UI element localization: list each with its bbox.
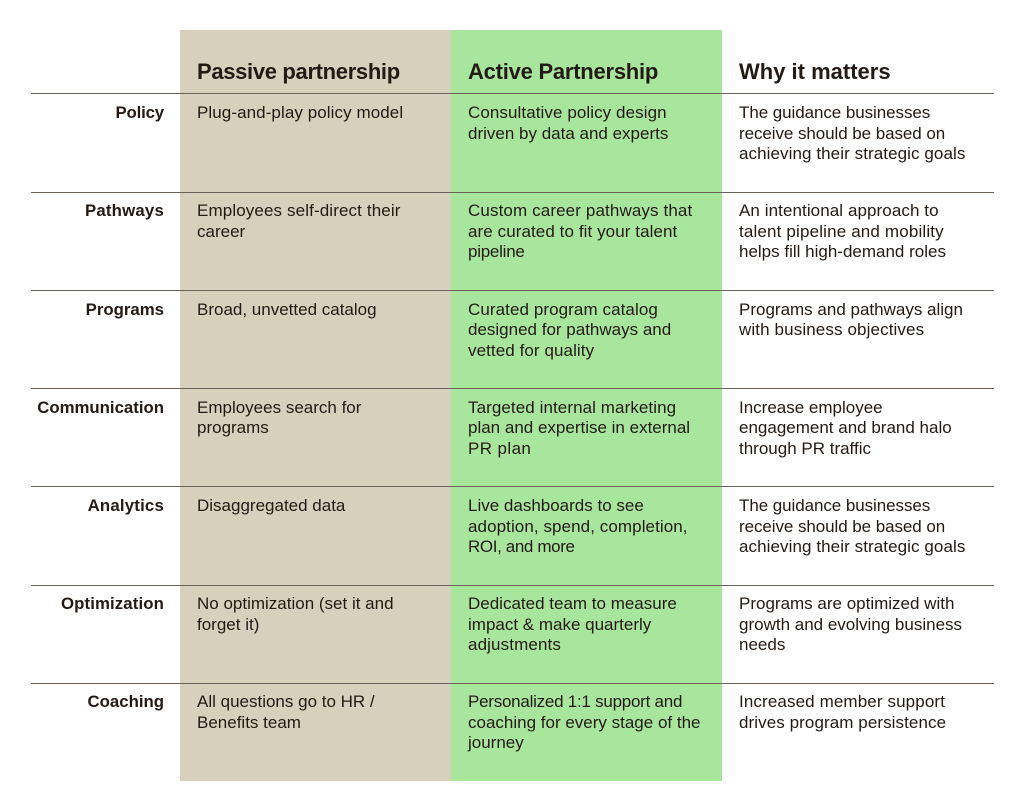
row label: optimization: Optimization — [61, 594, 164, 613]
why: programs — [739, 300, 963, 339]
row label: coaching: Coaching — [88, 692, 164, 711]
passive: pathways — [197, 201, 401, 240]
why: coaching — [739, 692, 946, 732]
active: communication: PR plan — [468, 438, 531, 458]
why: policy — [739, 103, 965, 163]
why: pathways: An intentional approach to — [739, 201, 939, 220]
active: pathways: are curated to fit your talent — [468, 222, 677, 240]
why: programs: Programs and pathways align — [739, 300, 963, 318]
why: optimization: Programs are optimized with — [739, 594, 954, 613]
why: coaching: drives program persistence — [739, 712, 946, 732]
why: policy: receive should be based on — [739, 124, 945, 142]
passive: programs: Broad, unvetted catalog — [197, 300, 377, 318]
why: pathways: talent pipeline and mobility — [739, 222, 944, 240]
active: pathways: Custom career pathways that — [468, 201, 692, 220]
passive: analytics: Disaggregated data — [197, 496, 345, 515]
why: analytics: The guidance businesses — [739, 496, 930, 515]
passive: pathways: Employees self-direct their — [197, 201, 401, 220]
active: optimization: Dedicated team to measure — [468, 594, 677, 613]
active: programs: designed for pathways and — [468, 320, 671, 339]
why: policy: achieving their strategic goals — [739, 144, 965, 163]
heading: why it matters: Why it matters — [739, 59, 891, 84]
passive: optimization: forget it) — [197, 614, 259, 634]
passive: coaching: Benefits team — [197, 712, 301, 732]
active: pathways — [468, 201, 692, 261]
active: optimization — [468, 594, 677, 654]
why: programs: with business objectives — [739, 320, 924, 339]
passive: pathways: career — [197, 222, 245, 240]
passive: communication: Employees search for — [197, 398, 361, 416]
why: analytics — [739, 496, 965, 556]
active: policy — [468, 103, 668, 142]
active: communication — [468, 398, 690, 458]
why: communication: engagement and brand halo — [739, 418, 952, 437]
active: analytics — [468, 496, 688, 556]
passive: optimization: No optimization (set it and — [197, 594, 394, 613]
row label: pathways: Pathways — [85, 201, 164, 220]
active: optimization: impact & make quarterly — [468, 614, 651, 634]
why: optimization: needs — [739, 635, 785, 654]
why: optimization: growth and evolving business — [739, 614, 962, 634]
why: analytics: receive should be based on — [739, 516, 945, 536]
active: optimization: adjustments — [468, 635, 561, 654]
active: programs: vetted for quality — [468, 340, 594, 360]
active: policy: driven by data and experts — [468, 124, 668, 142]
active: communication: Targeted internal marketing — [468, 398, 676, 416]
why: policy: The guidance businesses — [739, 103, 930, 122]
active: coaching — [468, 692, 700, 752]
row label: programs: Programs — [86, 300, 164, 318]
active: analytics: adoption, spend, completion, — [468, 516, 688, 536]
active: pathways: pipeline — [468, 242, 525, 261]
why: coaching: Increased member support — [739, 692, 945, 711]
active: analytics: Live dashboards to see — [468, 496, 644, 515]
passive: communication — [197, 398, 362, 437]
passive: policy: Plug-and-play policy model — [197, 103, 403, 122]
row label: policy: Policy — [115, 103, 164, 122]
active: programs — [468, 300, 671, 360]
passive: communication: programs — [197, 418, 269, 437]
passive: optimization — [197, 594, 394, 634]
why: pathways — [739, 201, 946, 261]
passive: coaching: All questions go to HR / — [197, 692, 375, 711]
why: pathways: helps fill high-demand roles — [739, 242, 946, 261]
active: policy: Consultative policy design — [468, 103, 667, 122]
heading: passive partnership: Passive partnership — [197, 59, 400, 84]
row label: communication: Communication — [37, 398, 164, 416]
why: optimization — [739, 594, 962, 654]
active: coaching: Personalized 1:1 support and — [468, 692, 682, 711]
active: coaching: coaching for every stage of the — [468, 712, 700, 732]
active: communication: plan and expertise in external — [468, 418, 690, 437]
active: coaching: journey — [468, 733, 524, 752]
heading: active partnership: Active Partnership — [468, 59, 658, 84]
panel: active partnership column background — [451, 30, 722, 781]
why: analytics: achieving their strategic goals — [739, 537, 965, 556]
why: communication: through PR traffic — [739, 438, 871, 458]
why: communication: Increase employee — [739, 398, 883, 416]
panel: passive partnership column background — [180, 30, 451, 781]
passive: coaching — [197, 692, 375, 732]
why: communication — [739, 398, 952, 458]
row label: analytics: Analytics — [88, 496, 164, 515]
active: analytics: ROI, and more — [468, 537, 575, 556]
active: programs: Curated program catalog — [468, 300, 658, 318]
